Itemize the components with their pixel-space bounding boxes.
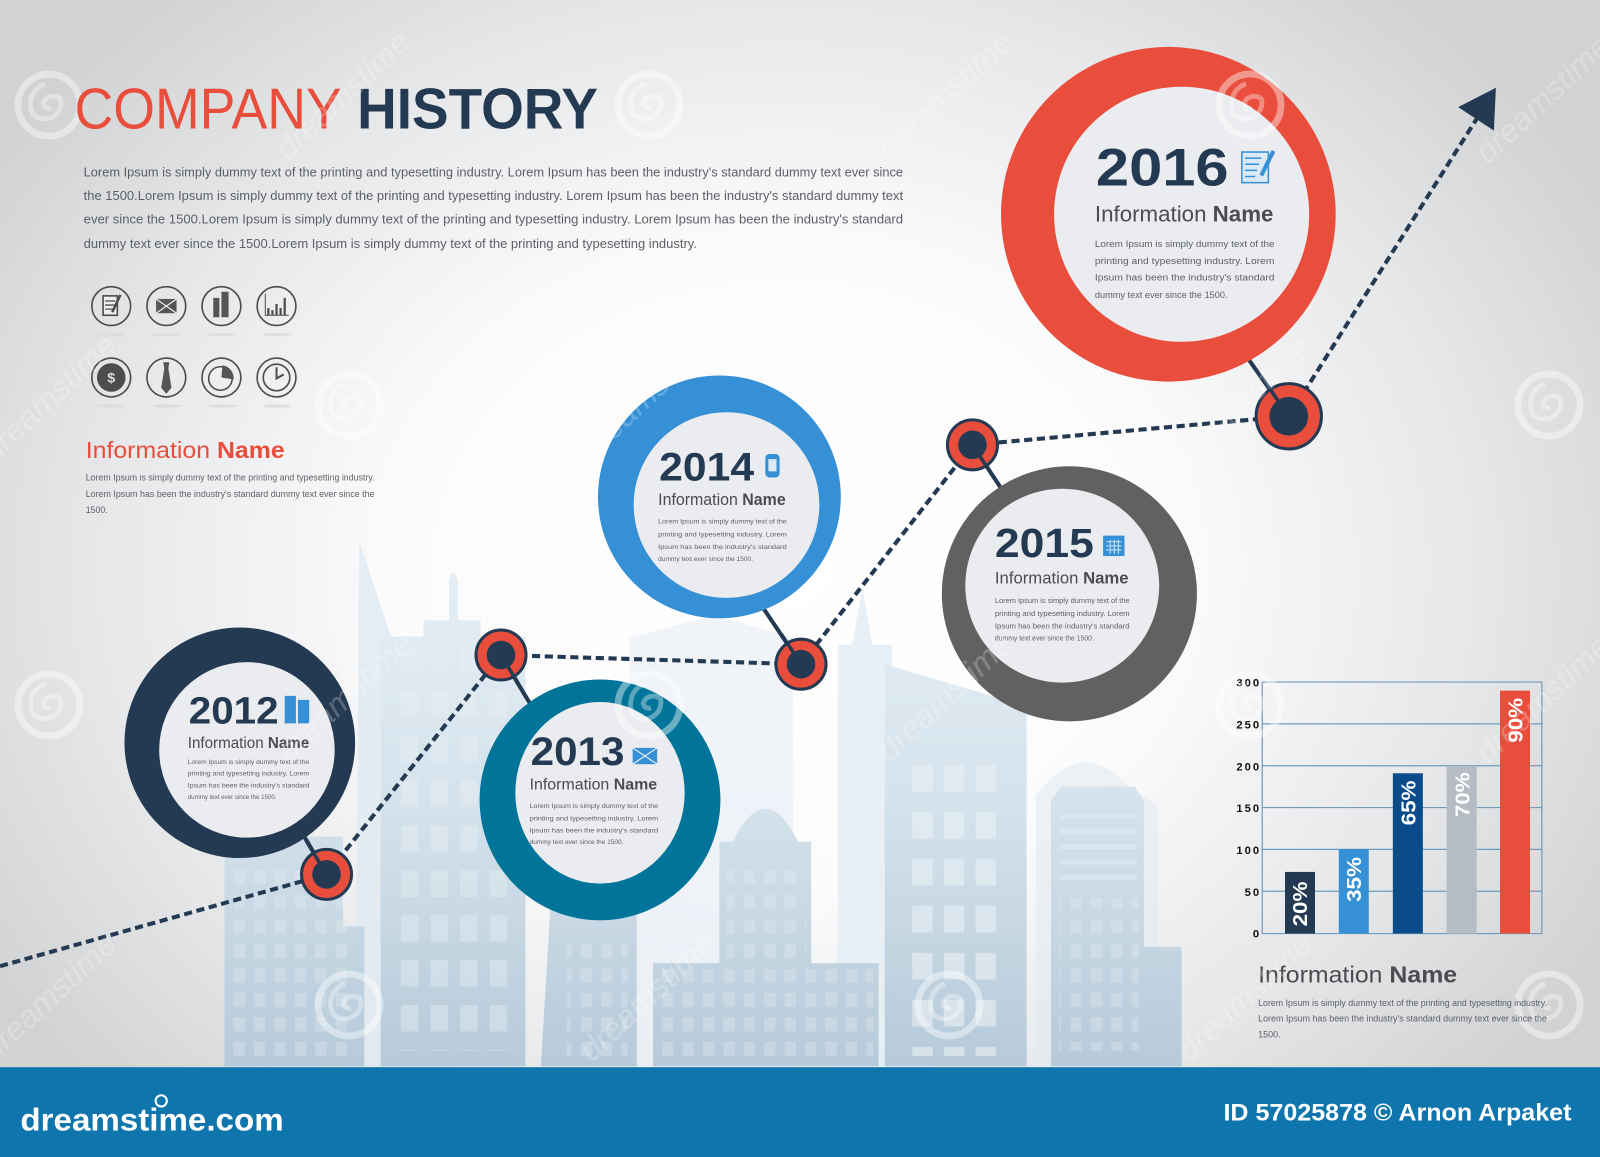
- milestone 2013: printing and typesetting industry. Lorem: [530, 815, 659, 822]
- y axis labels: [1236, 678, 1261, 941]
- milestone 2014: Ipsum has been the industry's standard: [658, 544, 787, 551]
- right information block: 1500.: [1258, 1030, 1281, 1040]
- milestone 2015: printing and typesetting industry. Lorem: [995, 611, 1130, 618]
- y axis labels: 300: [1236, 678, 1261, 690]
- y axis labels: 100: [1236, 845, 1261, 857]
- icon: buildings: [202, 287, 241, 336]
- title: [74, 78, 598, 142]
- icon: dollar coin: $: [107, 371, 115, 387]
- node 2013: [476, 630, 526, 680]
- milestone 2016: dummy text ever since the 1500.: [1095, 290, 1228, 300]
- milestone 2012: Ipsum has been the industry's standard: [188, 783, 310, 790]
- node 2014: [776, 639, 826, 689]
- icon: envelope: [147, 287, 186, 336]
- milestone 2016: 2016: [1096, 139, 1229, 198]
- node 2016: [1256, 384, 1321, 449]
- bar labels: 20%: [1290, 882, 1312, 926]
- node 2012: [302, 849, 352, 899]
- left information block: Lorem Ipsum is simply dummy text of the printing and typesetting industry.: [86, 473, 374, 483]
- milestone 2015: dummy text ever since the 1500.: [995, 636, 1094, 643]
- bar labels: 70%: [1452, 772, 1474, 817]
- bar labels: [1290, 698, 1527, 926]
- intro paragraph: dummy text ever since the 1500.Lorem Ipsum is simply dummy text of the printing and typesetting industry.: [84, 236, 697, 251]
- icon grid: [92, 287, 296, 408]
- milestone 2012: Lorem Ipsum is simply dummy text of the: [188, 759, 310, 766]
- milestone 2014: [598, 375, 841, 618]
- milestone 2012: [124, 627, 355, 858]
- left information block: [86, 437, 375, 515]
- milestone 2013: [480, 680, 720, 920]
- watermark overlay: dreamstime: [571, 925, 721, 1068]
- bar labels: 90%: [1505, 698, 1527, 743]
- title: HISTORY: [357, 78, 598, 142]
- watermark overlay: dreamstime: [869, 23, 1019, 166]
- bar labels: 65%: [1398, 781, 1420, 825]
- intro paragraph: ever since the 1500.Lorem Ipsum is simply dummy text of the printing and typesetting industry. Lorem Ipsum has been the industry's standard: [84, 211, 903, 226]
- y axis labels: 50: [1245, 887, 1261, 899]
- right information block: [1258, 962, 1547, 1040]
- intro paragraph: Lorem Ipsum is simply dummy text of the printing and typesetting industry. Lorem Ipsum has been the industry's standard dummy text ever since: [84, 165, 903, 180]
- y axis labels: 150: [1236, 803, 1261, 815]
- icon: document blue: [1242, 151, 1273, 183]
- milestone 2015: Lorem Ipsum is simply dummy text of the: [995, 598, 1130, 605]
- bar chart: [1236, 678, 1542, 941]
- icon: buildings blue: [285, 696, 309, 723]
- milestone 2014: Information Name: [658, 491, 786, 509]
- milestone 2014: dummy text ever since the 1500.: [658, 556, 753, 563]
- milestone 2012: Information Name: [188, 735, 309, 752]
- milestone 2013: 2013: [531, 730, 624, 774]
- icon: bar chart: [257, 287, 296, 336]
- milestone 2012: 2012: [189, 689, 279, 731]
- footer credit: ID 57025878 © Arnon Arpaket: [1223, 1099, 1571, 1126]
- timeline nodes: [302, 384, 1321, 899]
- watermark overlay: dreamstime: [1169, 327, 1319, 470]
- milestone 2015: 2015: [995, 520, 1094, 566]
- milestone 2016: Lorem Ipsum is simply dummy text of the: [1095, 239, 1274, 249]
- right information block: Lorem Ipsum is simply dummy text of the printing and typesetting industry.: [1258, 998, 1547, 1008]
- milestone 2013: Information Name: [530, 777, 657, 794]
- footer logo mark: [156, 1095, 167, 1106]
- watermark overlay: dreamstime: [267, 23, 417, 166]
- arrow head: [1458, 88, 1496, 131]
- milestone 2014: printing and typesetting industry. Lorem: [658, 532, 787, 539]
- milestone 2016: [1001, 47, 1336, 382]
- milestone 2014: Lorem Ipsum is simply dummy text of the: [658, 518, 787, 525]
- connector stems: [303, 357, 1289, 874]
- milestone 2015: Ipsum has been the industry's standard: [995, 623, 1130, 630]
- milestone 2013: Lorem Ipsum is simply dummy text of the: [530, 803, 658, 810]
- node stem overlays: [306, 387, 1289, 874]
- y axis labels: 200: [1236, 761, 1261, 773]
- bars: [1285, 691, 1530, 934]
- watermark overlay: dreamstime: [571, 323, 721, 466]
- icon: smartwatch blue: [765, 454, 780, 477]
- milestone 2015: Information Name: [995, 569, 1129, 588]
- watermark overlay: dreamstime: [869, 625, 1019, 768]
- milestone 2013: dummy text ever since the 1500.: [530, 839, 624, 846]
- node 2015: [947, 420, 997, 470]
- intro paragraph: [84, 165, 904, 251]
- milestone 2014: 2014: [659, 446, 754, 490]
- y axis labels: 250: [1236, 719, 1261, 731]
- milestone 2013: Ipsum has been the industry's standard: [530, 828, 658, 835]
- footer band: [0, 1067, 1600, 1157]
- milestone 2016: printing and typesetting industry. Lorem: [1095, 256, 1275, 266]
- icon: document: [92, 287, 131, 336]
- footer logo: dreamstime.com: [20, 1101, 284, 1137]
- city skyline illustration: [224, 541, 1182, 1066]
- milestone 2012: dummy text ever since the 1500.: [188, 794, 277, 801]
- watermark overlay: dreamstime: [269, 625, 419, 768]
- icon: calendar blue: [1103, 536, 1124, 556]
- milestone 2015: [942, 466, 1197, 721]
- watermark overlay: dreamstime: [1169, 925, 1319, 1068]
- left information block: Lorem Ipsum has been the industry's standard dummy text ever since the: [86, 489, 375, 499]
- y axis labels: 0: [1253, 929, 1261, 941]
- icon: envelope blue: [633, 748, 657, 764]
- right information block: Lorem Ipsum has been the industry's standard dummy text ever since the: [1258, 1013, 1547, 1023]
- intro paragraph: the 1500.Lorem Ipsum is simply dummy text of the printing and typesetting industry. Lorem Ipsum has been the industry's standard dummy text: [84, 188, 904, 203]
- icon: necktie: [147, 358, 186, 408]
- icon: dollar coin: [92, 358, 131, 408]
- chart gridlines: [1262, 682, 1542, 934]
- left information block: 1500.: [86, 505, 108, 515]
- icon: clock: [257, 358, 296, 408]
- bar labels: 35%: [1344, 857, 1366, 902]
- title: COMPANY: [74, 78, 342, 142]
- milestone 2016: Ipsum has been the industry's standard: [1095, 273, 1274, 283]
- icon: pie chart: [202, 358, 241, 408]
- right information block: Information Name: [1258, 962, 1457, 988]
- timeline dashed line: [0, 114, 1480, 966]
- left information block: Information Name: [86, 437, 285, 463]
- milestone 2012: printing and typesetting industry. Lorem: [188, 770, 309, 777]
- milestone 2016: Information Name: [1095, 201, 1273, 226]
